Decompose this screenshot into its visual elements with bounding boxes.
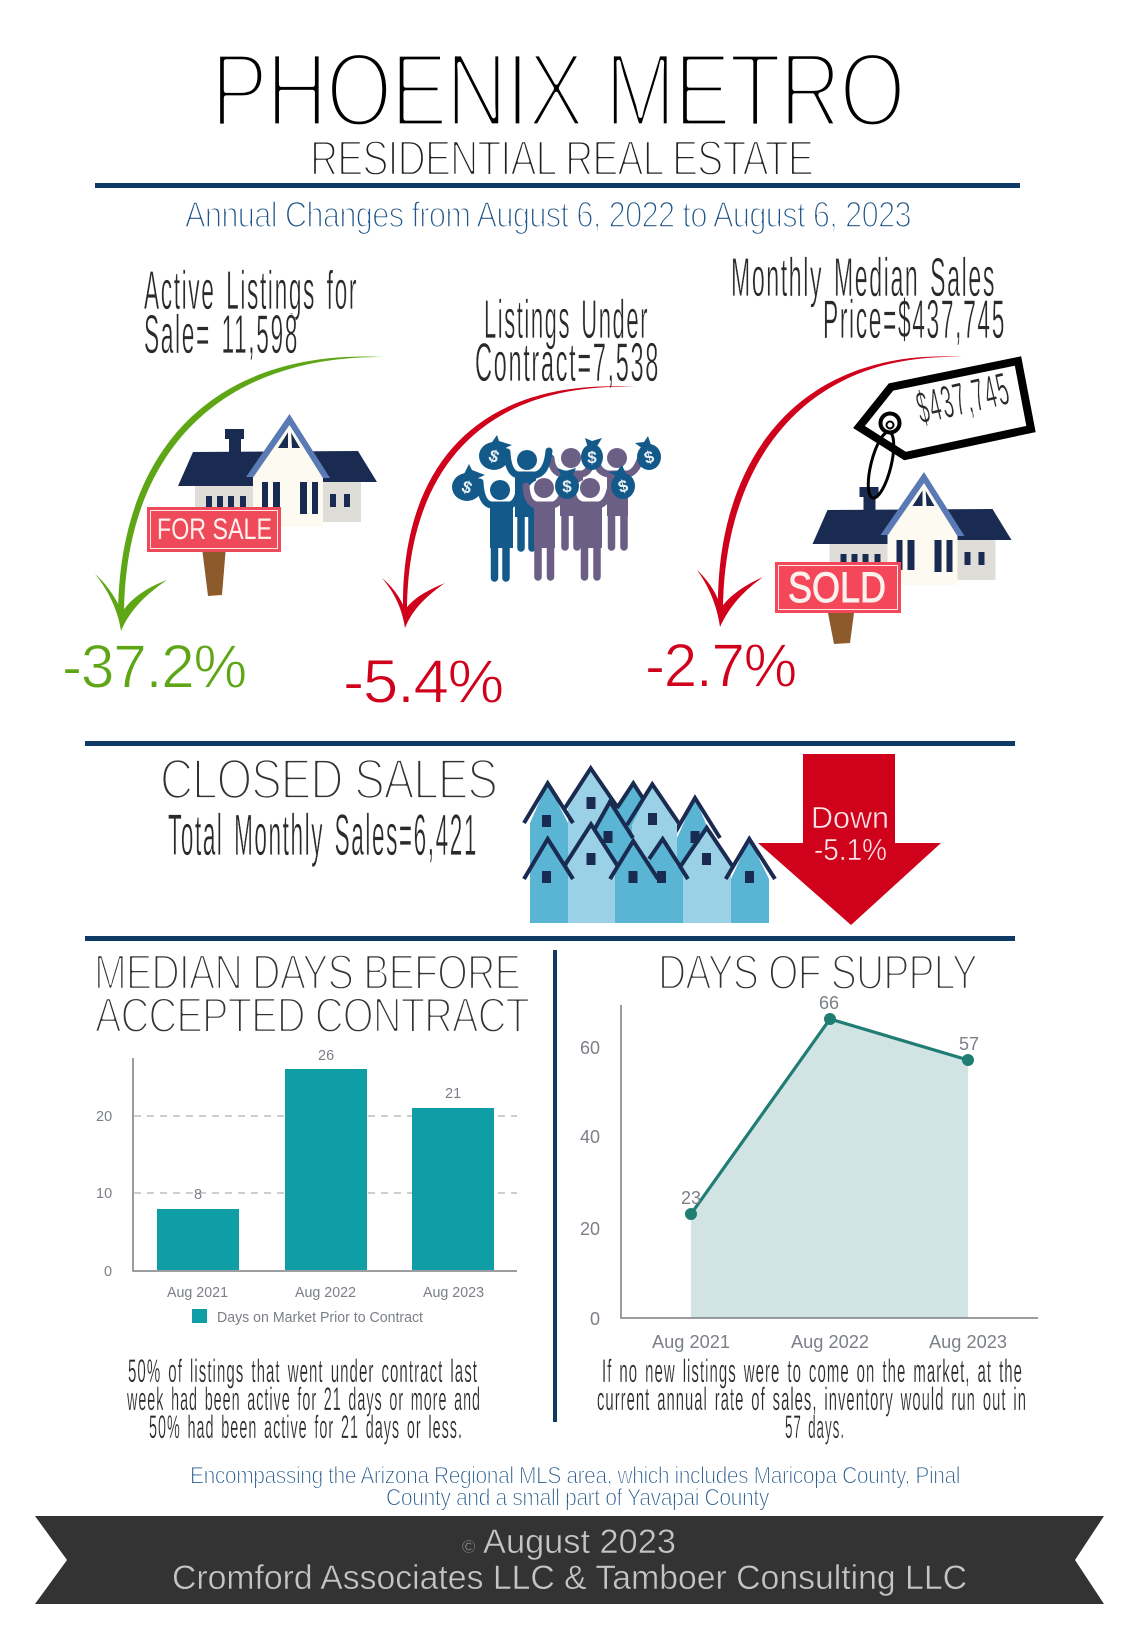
line chart: 40 xyxy=(580,1127,600,1147)
panel: listings under contract xyxy=(343,288,661,716)
panel: days of supply xyxy=(580,946,1038,1445)
front row: blue figure xyxy=(480,480,520,578)
subtitle: RESIDENTIAL REAL ESTATE xyxy=(310,132,813,186)
active listings label xyxy=(144,259,358,365)
dollar signs: $ xyxy=(587,448,597,467)
back row: blue figure xyxy=(507,450,549,548)
copyright line: © August 2023 xyxy=(462,1523,676,1561)
arrow: red down xyxy=(697,356,963,627)
icon: sold sign: SOLD xyxy=(788,564,886,612)
money bags xyxy=(452,435,661,501)
panel: median days before accepted contract xyxy=(94,946,529,1445)
title: PHOENIX METRO xyxy=(211,32,904,149)
median price label xyxy=(731,246,1006,350)
panel: median days before accepted contract: 50% of listings that went under contract last xyxy=(128,1353,478,1389)
coverage note xyxy=(190,1462,960,1512)
closed sales heading: CLOSED SALES xyxy=(160,748,497,812)
line chart: 20 xyxy=(580,1219,600,1239)
line chart: Aug 2022 xyxy=(791,1332,869,1352)
bar chart: 8 xyxy=(194,1187,202,1203)
line chart: 57 xyxy=(959,1034,979,1054)
arrow: big red down: Down xyxy=(811,800,889,835)
bar chart: 20 xyxy=(96,1109,112,1125)
icon: price tag: $437,745 xyxy=(912,362,1015,434)
arrow: big red down: -5.1% xyxy=(814,832,887,867)
panel: median days before accepted contract: week had been active for 21 days or more and xyxy=(127,1381,481,1417)
arrow: big red down xyxy=(758,754,941,925)
text: Contract=7,538 xyxy=(475,331,660,393)
active listings label: Sale= 11,598 xyxy=(144,303,299,365)
dollar signs: $ xyxy=(642,447,657,468)
panel: active listings xyxy=(62,259,383,700)
icon: house sold xyxy=(812,472,1012,585)
bar chart: 10 xyxy=(96,1186,112,1202)
panel: median days before accepted contract: 50% had been active for 21 days or less. xyxy=(149,1409,463,1445)
line chart: 60 xyxy=(580,1038,600,1058)
dollar signs: $ xyxy=(616,476,631,497)
arrow: red down xyxy=(382,386,636,628)
front row: purple figures xyxy=(526,478,610,577)
date range subheading: Annual Changes from August 6, 2022 to August 6, 2023 xyxy=(185,194,911,235)
chart caption xyxy=(597,1353,1027,1445)
icon: sold sign xyxy=(775,562,901,644)
line chart: 66 xyxy=(819,993,839,1013)
icon: price tag xyxy=(859,361,1031,500)
median price change: -2.7% xyxy=(645,632,796,700)
bar chart: 0 xyxy=(104,1264,112,1280)
bar chart: 26 xyxy=(318,1048,334,1064)
line chart: Aug 2023 xyxy=(929,1332,1007,1352)
under contract change: -5.4% xyxy=(343,648,503,716)
panel: median sales price xyxy=(645,246,1031,700)
chart heading: ACCEPTED CONTRACT xyxy=(95,989,529,1043)
legend: Days on Market Prior to Contract xyxy=(217,1310,423,1326)
icon: crowd with money bags xyxy=(452,435,661,578)
line chart: 23 xyxy=(681,1188,701,1208)
under contract label xyxy=(475,288,660,393)
bar chart xyxy=(96,1048,517,1326)
panel: closed sales: Total Monthly Sales=6,421 xyxy=(168,803,478,868)
active listings change: -37.2% xyxy=(62,632,246,700)
back row: purple figures xyxy=(551,448,640,547)
line chart xyxy=(580,993,1038,1352)
coverage note: Encompassing the Arizona Regional MLS area, which includes Maricopa County, Pinal xyxy=(190,1462,960,1490)
text: Listings Under xyxy=(484,288,649,350)
chart caption: 57 days. xyxy=(785,1409,845,1445)
chart caption xyxy=(127,1353,481,1445)
line chart: Aug 2021 xyxy=(652,1332,730,1352)
bar chart: 21 xyxy=(445,1086,461,1102)
footer banner xyxy=(35,1516,1104,1604)
text: Active Listings for xyxy=(144,259,358,321)
bar chart: Aug 2021 xyxy=(167,1285,228,1301)
dollar signs: $ xyxy=(459,477,475,498)
chart heading: MEDIAN DAYS BEFORE xyxy=(94,946,520,1000)
dollar signs: $ xyxy=(562,477,572,496)
arrow: green down xyxy=(95,357,383,631)
icon: house for sale: FOR SALE xyxy=(157,513,272,546)
company names: Cromford Associates LLC & Tamboer Consulting LLC xyxy=(172,1559,967,1597)
dollar signs xyxy=(459,446,657,498)
panel: closed sales xyxy=(160,748,941,925)
chart heading xyxy=(94,946,529,1043)
icon: house for sale xyxy=(147,414,377,596)
icon: row of houses xyxy=(524,768,775,923)
line chart: 0 xyxy=(590,1309,600,1329)
bar chart: Aug 2023 xyxy=(423,1285,484,1301)
chart heading: DAYS OF SUPPLY xyxy=(658,946,977,1000)
coverage note: County and a small part of Yavapai County xyxy=(386,1484,769,1512)
bar chart: Aug 2022 xyxy=(295,1285,356,1301)
dollar signs: $ xyxy=(486,446,502,467)
